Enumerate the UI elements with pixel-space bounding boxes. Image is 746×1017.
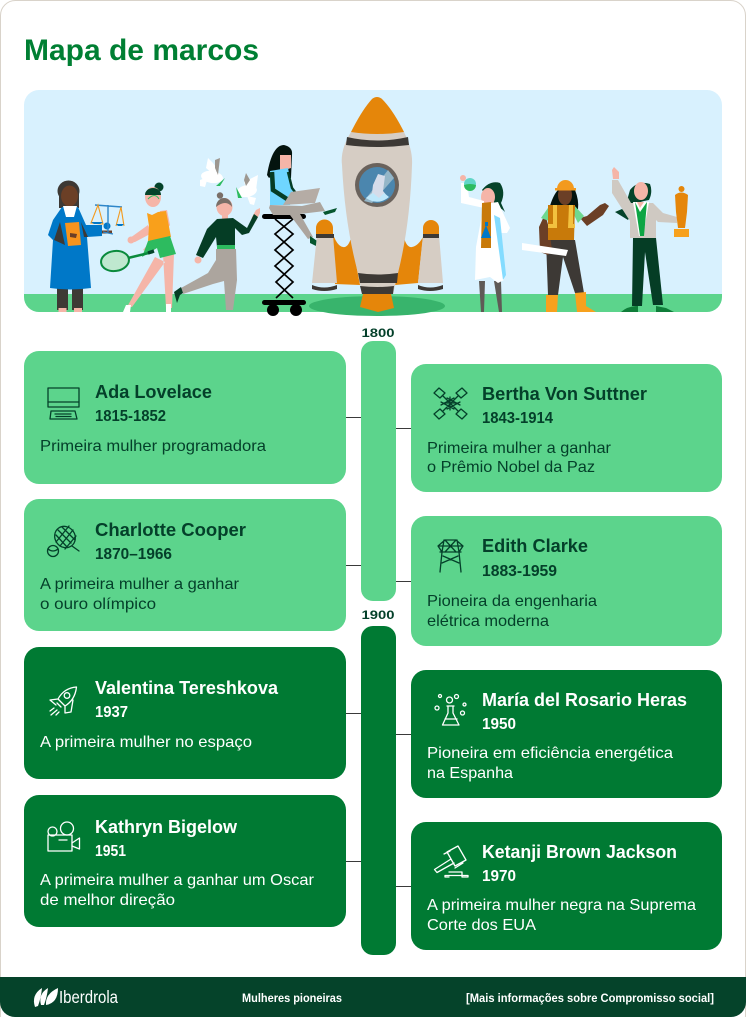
illustration: rocket [309,97,445,316]
icon: flask with bubbles [435,694,466,725]
panel: Kathryn Bigelow [24,795,346,927]
panel: Charlotte Cooper: Charlotte Cooper [95,520,246,540]
footer: [Mais informações sobre Compromisso social] [466,993,714,1005]
logo: Iberdrola: Iberdrola [59,987,118,1007]
icon: doves [200,158,258,205]
panel: Ketanji Brown Jackson: Ketanji Brown Jackson [482,842,677,862]
panel: Ada Lovelace: Ada Lovelace [95,382,212,402]
panel: María del Rosario Heras: Pioneira em eficiência energética [427,745,673,762]
footer: Mulheres pioneiras [242,993,342,1005]
title: Mapa de marcos [24,34,259,67]
figure: woman with doves [174,192,260,310]
panel: Bertha Von Suttner: 1843-1914 [482,410,553,427]
illustration: pioneering women around a rocket [24,90,722,316]
panel: María del Rosario Heras: María del Rosario Heras [482,690,687,710]
panel: Ketanji Brown Jackson: 1970 [482,868,516,885]
figure: judge with scales [48,180,124,312]
panel: Bertha Von Suttner: Bertha Von Suttner [482,384,647,404]
timeline: 1900s: 1900 [362,608,395,622]
timeline: 1800s [361,326,396,601]
panel: Bertha Von Suttner: Primeira mulher a ganhar [427,440,612,457]
timeline: 1800s: 1800 [362,326,395,340]
panel: María del Rosario Heras: 1950 [482,716,516,733]
panel: Edith Clarke: Edith Clarke [482,536,588,556]
footer [0,977,746,1017]
panel: Kathryn Bigelow: Kathryn Bigelow [95,817,238,837]
panel: Valentina Tereshkova: A primeira mulher no espaço [40,734,252,751]
panel: Charlotte Cooper [24,499,346,631]
icon: joined hands [434,388,467,419]
panel: Valentina Tereshkova: Valentina Tereshkova [95,678,279,698]
panel: Ketanji Brown Jackson [411,822,722,950]
panel: Kathryn Bigelow: A primeira mulher a ganhar um Oscar [40,872,315,889]
panel: María del Rosario Heras: na Espanha [427,765,513,782]
panel: Charlotte Cooper: A primeira mulher a ganhar [40,576,240,593]
icon: computer [48,388,79,419]
panel: Ada Lovelace: 1815-1852 [95,408,166,425]
panel: Kathryn Bigelow: 1951 [95,843,126,860]
panel: Valentina Tereshkova: 1937 [95,704,128,721]
panel: Charlotte Cooper: 1870–1966 [95,546,172,563]
panel: Bertha Von Suttner [411,364,722,492]
figure: construction worker [522,180,609,312]
panel: Edith Clarke: Pioneira da engenharia [427,593,597,610]
icon: rocket window with astronaut [355,163,399,207]
panel: María del Rosario Heras [411,670,722,798]
panel: Ketanji Brown Jackson: Corte dos EUA [427,917,536,934]
figure: film director with trophy [612,167,689,312]
icon: golden trophy [674,186,689,237]
panel: Edith Clarke: 1883-1959 [482,563,557,580]
icon: electricity pylon [438,540,463,572]
panel: Kathryn Bigelow: de melhor direção [40,892,175,909]
panel: Bertha Von Suttner: o Prêmio Nobel da Paz [427,459,595,476]
figure: scissor lift with woman on laptop [262,145,337,316]
panel: Ada Lovelace [24,351,346,484]
panel: Ketanji Brown Jackson: A primeira mulher negra na Suprema [427,897,696,914]
panel: Edith Clarke: elétrica moderna [427,613,549,630]
figure: tennis player [100,182,176,312]
icon: gavel [434,846,468,877]
panel: Valentina Tereshkova [24,647,346,779]
panel: Ada Lovelace: Primeira mulher programadora [40,438,266,455]
figure: scientist [460,175,510,312]
panel: Charlotte Cooper: o ouro olímpico [40,596,156,613]
icon: film camera [48,822,80,851]
panel: Edith Clarke [411,516,722,646]
icon: tennis racket and ball [48,522,80,556]
icon: rocket [50,687,76,715]
logo: Iberdrola [34,987,118,1007]
timeline: 1900s [361,608,396,955]
